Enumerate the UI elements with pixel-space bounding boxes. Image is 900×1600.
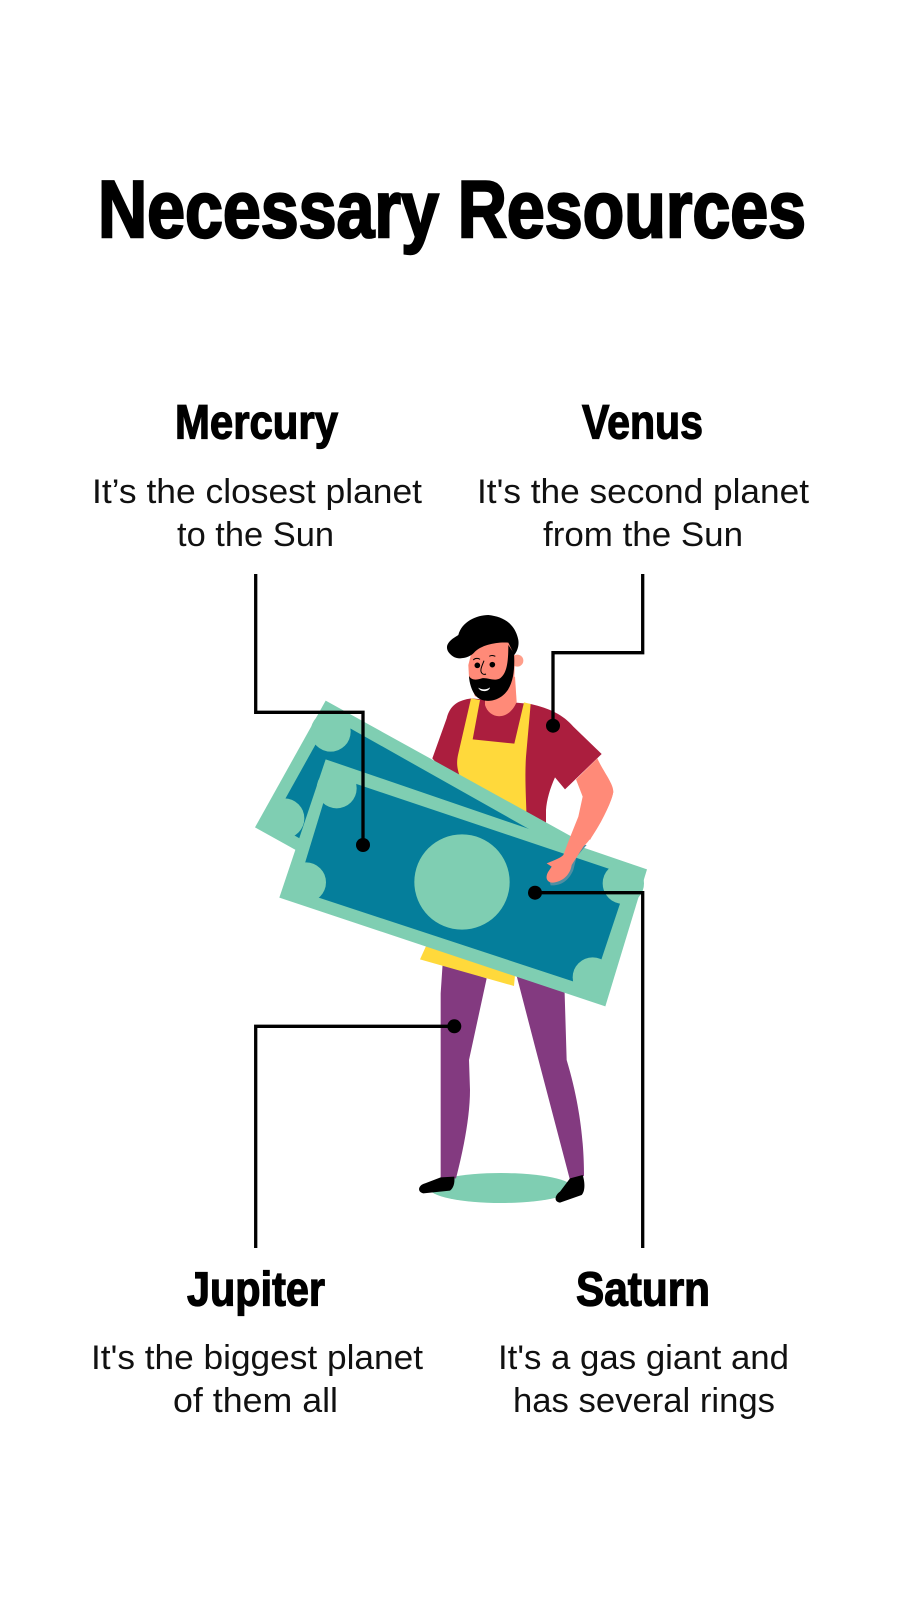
description: Jupiter: It's the biggest planet — [91, 1339, 424, 1377]
text block: Saturn — [498, 1264, 789, 1420]
description: Mercury — [92, 473, 423, 554]
text block: Jupiter — [91, 1264, 424, 1420]
description: Saturn: It's a gas giant and — [498, 1339, 789, 1377]
apron — [457, 698, 531, 820]
text block: Venus — [477, 396, 810, 554]
shirt — [432, 698, 602, 825]
heading: Jupiter: Jupiter — [187, 1264, 325, 1316]
heading: Saturn: Saturn — [576, 1264, 710, 1316]
description: Jupiter — [91, 1339, 424, 1420]
hair — [447, 615, 519, 658]
eyes and nose — [473, 656, 495, 674]
ear — [511, 655, 523, 667]
description: Jupiter: of them all — [173, 1382, 338, 1420]
legs and shoes — [419, 963, 584, 1203]
forearm and hand — [547, 792, 613, 885]
back banknote — [255, 701, 577, 957]
torso, apron and head — [420, 615, 602, 986]
description: Venus: It's the second planet — [477, 473, 810, 511]
banknotes — [255, 701, 647, 1006]
description: Mercury: It’s the closest planet — [92, 473, 423, 511]
beard — [469, 645, 514, 701]
description: Venus: from the Sun — [543, 516, 743, 554]
connector: Mercury — [256, 574, 370, 852]
connector: Jupiter — [256, 1019, 461, 1248]
description: Mercury: to the Sun — [177, 516, 334, 554]
heading: Mercury: Mercury — [175, 396, 338, 450]
illustration: person holding banknotes — [255, 615, 647, 1203]
description: Saturn: has several rings — [513, 1382, 775, 1420]
description: Venus — [477, 473, 810, 554]
description: Saturn — [498, 1339, 789, 1420]
arm — [576, 758, 613, 840]
face — [468, 637, 515, 697]
neck — [485, 677, 517, 716]
apron skirt — [420, 930, 517, 986]
ground shadow — [429, 1173, 573, 1203]
front banknote — [279, 759, 647, 1006]
connector: Saturn — [528, 886, 643, 1248]
connector: Venus — [546, 574, 643, 733]
text block: Mercury — [92, 396, 423, 554]
mouth — [478, 687, 490, 691]
heading: Venus: Venus — [582, 396, 703, 450]
